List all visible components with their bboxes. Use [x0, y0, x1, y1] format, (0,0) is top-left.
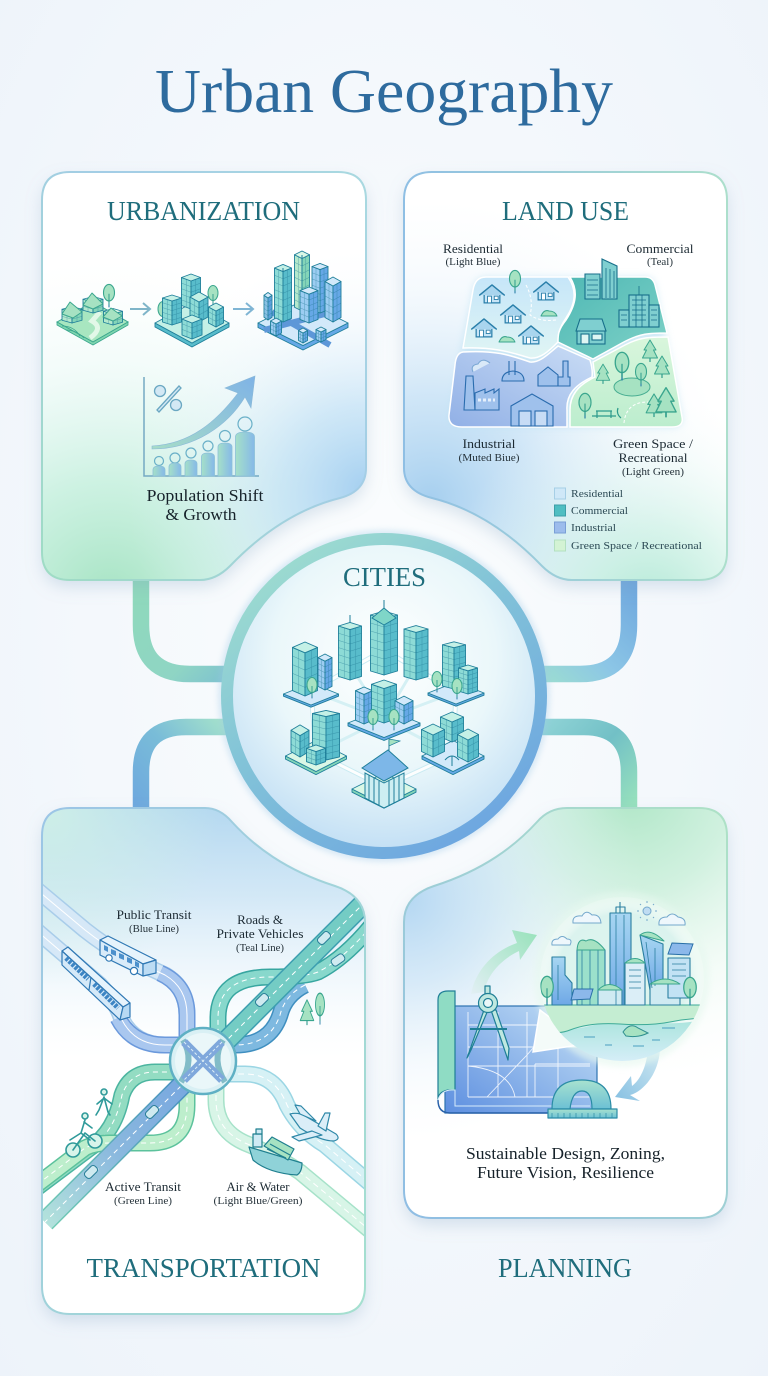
title: Urban Geography [155, 58, 613, 126]
solar panels [571, 943, 693, 1000]
panel: planning [404, 808, 727, 1218]
label: active transit: Active Transit [105, 1179, 181, 1194]
building group: top right [428, 642, 484, 706]
arrow: blue back to blueprint [615, 1050, 660, 1101]
label: green space [613, 436, 693, 478]
boat [623, 1026, 648, 1037]
building group: lower left [286, 710, 346, 775]
network links [311, 650, 456, 787]
hub: central interchange [170, 1028, 236, 1094]
panel: transportation [30, 808, 372, 1314]
legend: Industrial [571, 523, 616, 534]
label: active transit [105, 1179, 181, 1207]
arrow: town to city [233, 303, 253, 315]
caption: population shift: Population Shift [146, 486, 264, 505]
connector: transportation to cities [141, 727, 232, 810]
caption: population shift: & Growth [166, 505, 237, 524]
legend: Residential [571, 489, 623, 500]
label: industrial [458, 436, 520, 464]
icon: blueprint [438, 991, 597, 1113]
label: roads [216, 912, 304, 954]
label: industrial: (Muted Biue) [458, 453, 520, 464]
zone: commercial [558, 259, 667, 359]
legend: Green Space / Recreational [571, 541, 702, 552]
legend: Commercial [571, 506, 628, 517]
zone: green space [570, 337, 682, 427]
label: air and water: (Light Blue/Green) [214, 1196, 303, 1207]
road: active transit [30, 1072, 187, 1193]
label: green space: (Light Green) [622, 467, 685, 478]
water [556, 1022, 692, 1061]
road: light green water route [216, 1085, 372, 1232]
rooftop greenery [577, 932, 680, 990]
icon: compass [467, 986, 509, 1060]
road: main diagonal [45, 895, 372, 1222]
clouds and sun [552, 901, 685, 945]
label: commercial [626, 241, 694, 268]
caption: population shift [146, 486, 264, 524]
label: residential: Residential [443, 241, 503, 256]
label: green space: Recreational [618, 450, 688, 465]
center circle: cities [218, 530, 550, 862]
axes [144, 377, 259, 476]
road: vehicles branches [218, 925, 372, 1045]
label: roads: (Teal Line) [236, 943, 285, 954]
ground [540, 1005, 710, 1032]
icon: pedestrian [96, 1089, 112, 1115]
label: commercial: Commercial [626, 241, 694, 256]
label: air and water [214, 1179, 303, 1207]
trees [541, 976, 696, 1005]
heading: transportation: TRANSPORTATION [86, 1253, 320, 1283]
caption: planning: Future Vision, Resilience [477, 1163, 654, 1182]
civic building [352, 739, 416, 808]
tower: centre [370, 600, 398, 675]
label: residential [443, 241, 503, 268]
icon: trees [300, 993, 324, 1025]
building group: top left [284, 642, 338, 707]
panel: urbanization [42, 172, 366, 580]
icon: airplane [290, 1105, 338, 1141]
tower: left [338, 615, 362, 680]
heading: land use: LAND USE [502, 196, 629, 226]
icon: bus [100, 936, 156, 976]
label: active transit: (Green Line) [114, 1196, 173, 1207]
tower: right [404, 626, 428, 680]
building group: central [348, 680, 420, 740]
icon: cyclist [66, 1113, 102, 1157]
roads network [30, 884, 372, 1232]
icon: city tile [258, 251, 348, 350]
zone: industrial [449, 346, 592, 427]
caption: planning [466, 1144, 665, 1182]
map glow [449, 277, 682, 427]
label: roads: Private Vehicles [216, 926, 304, 941]
label: industrial: Industrial [462, 436, 516, 451]
label: public transit: Public Transit [116, 907, 192, 922]
zone: residential [463, 270, 574, 358]
connector: land use to cities [536, 578, 629, 674]
label: air and water: Air & Water [226, 1179, 290, 1194]
heading: cities: CITIES [343, 562, 426, 592]
label: residential: (Light Blue) [446, 257, 501, 268]
arrow: village to town [130, 303, 150, 315]
people figures [153, 417, 254, 476]
legend [554, 488, 702, 552]
label: green space: Green Space / [613, 436, 693, 451]
caption: planning: Sustainable Design, Zoning, [466, 1144, 665, 1163]
vision bubble: future city [533, 891, 710, 1067]
icon: village tile [57, 284, 128, 345]
map: land use zones [449, 259, 682, 427]
panel: land use [404, 172, 727, 580]
chart: population growth [144, 376, 259, 476]
label: public transit: (Blue Line) [129, 924, 180, 935]
heading: planning: PLANNING [498, 1253, 632, 1283]
label: roads: Roads & [237, 912, 283, 927]
cars [83, 930, 346, 1180]
label: public transit [116, 907, 192, 935]
heading: urbanization: URBANIZATION [107, 196, 300, 226]
percent sign [154, 386, 182, 412]
label: commercial: (Teal) [647, 257, 674, 268]
icon: cargo ship [249, 1129, 302, 1175]
road: light blue air route [228, 1074, 372, 1185]
building group: lower right [422, 712, 484, 775]
icon: protractor [548, 1080, 617, 1118]
growth arrow [152, 376, 255, 449]
road: public transit [30, 884, 187, 1045]
connector: planning to cities [536, 727, 629, 810]
skyline [552, 902, 690, 1005]
icon: train [62, 947, 130, 1020]
icon: town tile [155, 274, 229, 347]
connector: urbanization to cities [141, 578, 232, 674]
arrow: green up to vision [471, 930, 537, 994]
